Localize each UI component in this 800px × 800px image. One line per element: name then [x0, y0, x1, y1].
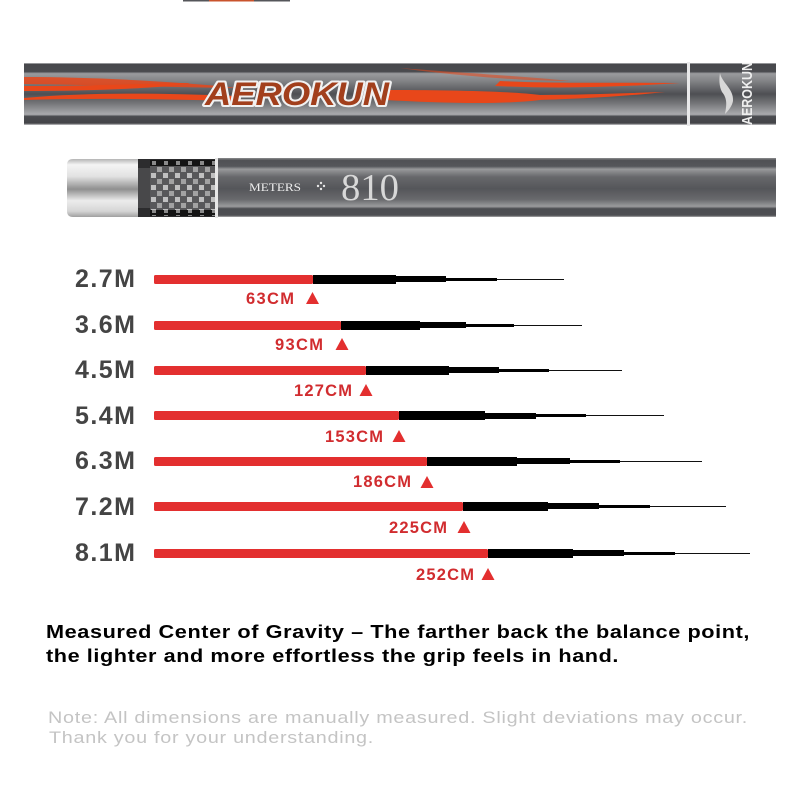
row 2.7M [75, 265, 564, 308]
row 5.4M [75, 402, 664, 446]
row 2.7M: 2.7M [75, 265, 135, 293]
note text [48, 709, 748, 747]
heading: measured center of gravity: Measured Center of Gravity – The farther back the balance point, [46, 621, 750, 642]
metal end cap [67, 159, 138, 217]
rod with AEROKUN logo [24, 62, 776, 126]
row 8.1M [75, 539, 750, 584]
logo text AEROKUN: AEROKUN [204, 76, 390, 112]
row 7.2M [75, 493, 726, 537]
heading: measured center of gravity: the lighter and more effortless the grip feels in hand. [46, 645, 619, 666]
row 2.7M: 63CM [246, 290, 294, 308]
810 number: 810 [341, 167, 399, 209]
row 5.4M: 5.4M [75, 402, 135, 430]
row 8.1M: 252CM [416, 566, 474, 584]
row 6.3M: 6.3M [75, 447, 135, 475]
icon: dots [317, 182, 325, 190]
row 8.1M: 8.1M [75, 539, 135, 567]
orange flame graphic [24, 68, 680, 103]
icon: wing emblem [719, 73, 733, 114]
row 6.3M: 186CM [353, 473, 411, 491]
top rod fragment [183, 0, 290, 2]
separator [687, 62, 690, 126]
chart: balance points [75, 265, 750, 584]
row 4.5M: 127CM [294, 382, 352, 400]
row 3.6M [75, 311, 582, 354]
row 7.2M: 225CM [389, 519, 447, 537]
heading: measured center of gravity [46, 621, 750, 666]
row 6.3M [75, 447, 702, 491]
row 4.5M [75, 356, 622, 400]
vertical logo text: AEROKUN [739, 62, 756, 125]
METERS label: METERS [249, 180, 301, 194]
note text: Thank you for your understanding. [49, 729, 374, 747]
row 4.5M: 4.5M [75, 356, 135, 384]
row 3.6M: 93CM [275, 336, 323, 354]
rod body [218, 158, 776, 217]
rod butt section with METERS 810 [67, 158, 776, 218]
row 5.4M: 153CM [325, 428, 383, 446]
carbon weave section [138, 159, 215, 217]
row 7.2M: 7.2M [75, 493, 135, 521]
row 3.6M: 3.6M [75, 311, 135, 339]
note text: Note: All dimensions are manually measured. Slight deviations may occur. [48, 709, 748, 727]
